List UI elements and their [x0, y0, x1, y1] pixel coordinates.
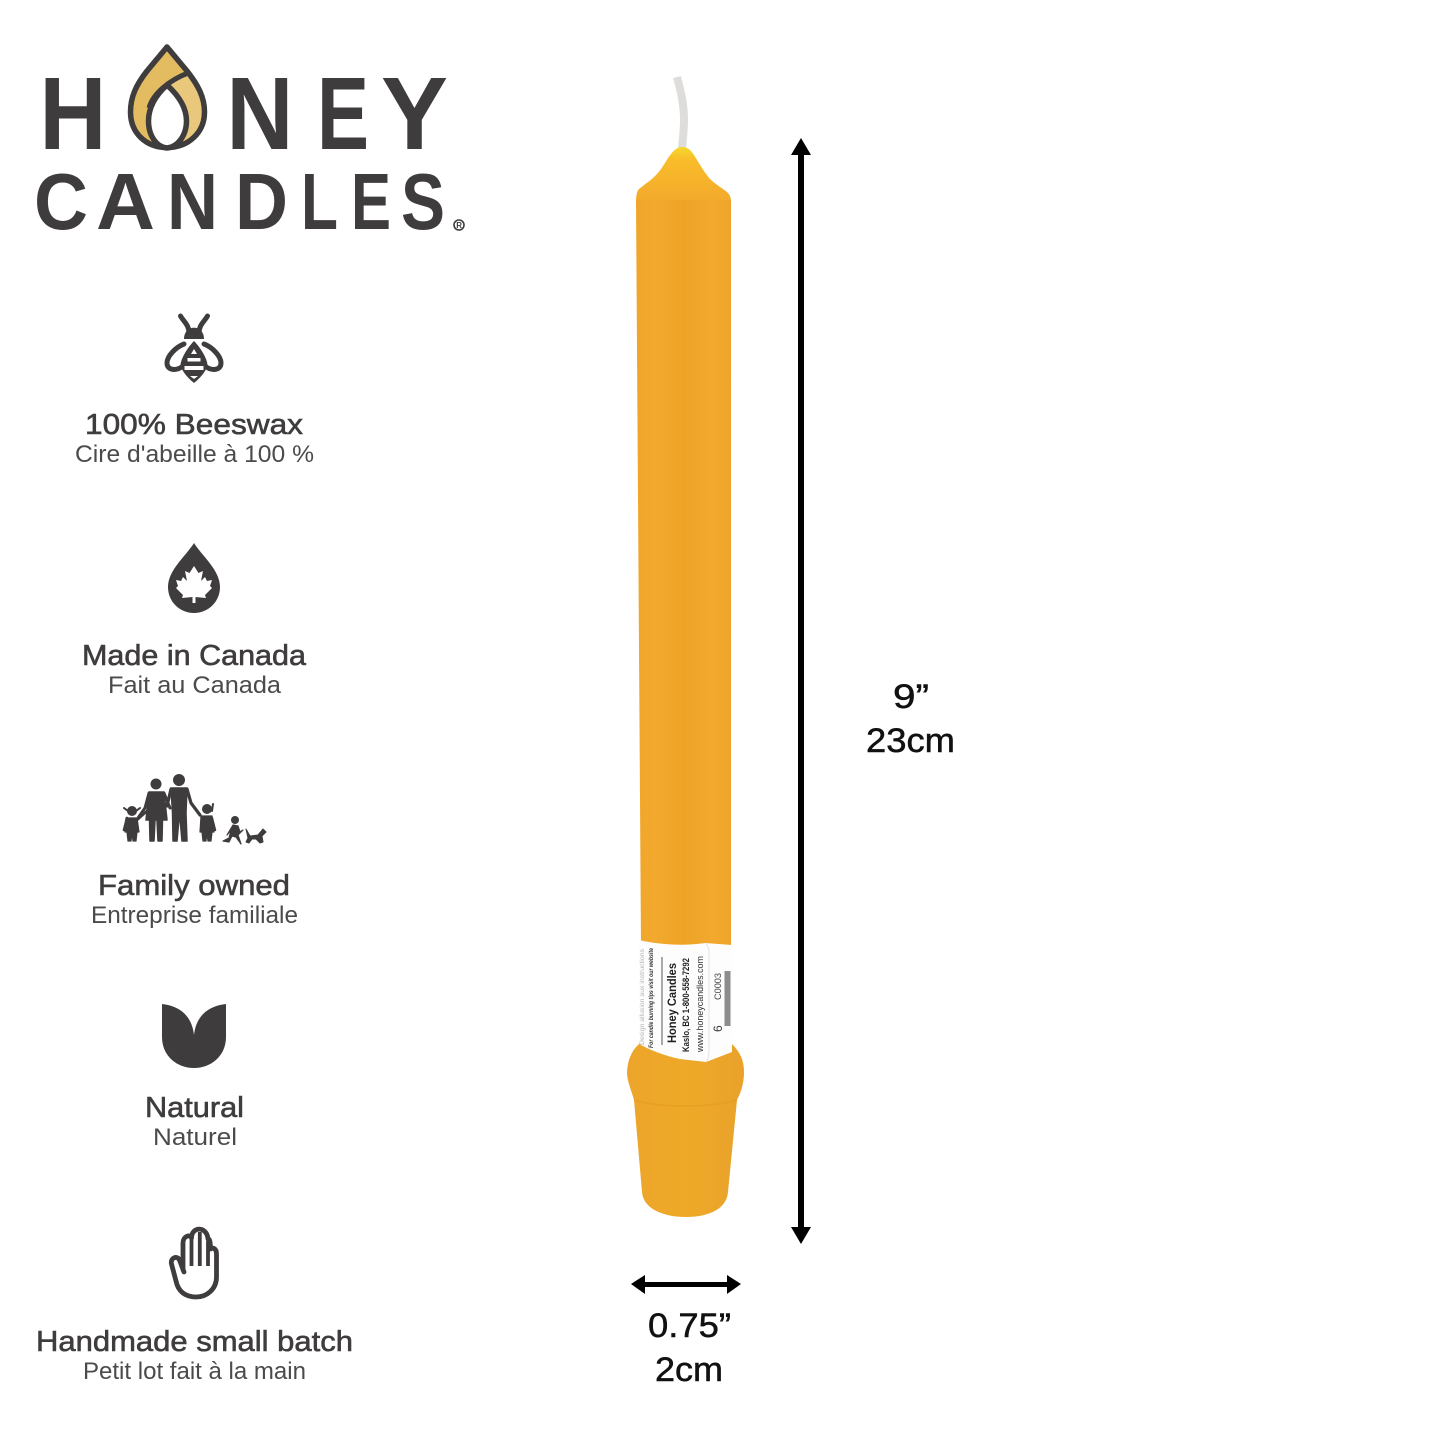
measurement: height label: 23cm	[866, 722, 955, 760]
registered mark	[454, 220, 464, 230]
icon: bee	[167, 316, 221, 383]
measurement: height label: 9”	[893, 678, 929, 716]
label text: Kaslo, BC 1-800-558-7292	[681, 958, 691, 1052]
logo wordmark: CANDLES: E	[351, 157, 391, 246]
icon: family silhouettes	[124, 774, 266, 844]
measurement: width label: 0.75”	[648, 1307, 731, 1345]
measurement: width label: 2cm	[655, 1351, 723, 1389]
french subheading: Entreprise familiale	[91, 902, 298, 929]
feature: Family owned	[91, 774, 298, 929]
feature: 100% Beeswax	[75, 316, 314, 468]
label text: C0003	[713, 973, 723, 1000]
label text	[640, 948, 725, 1053]
logo wordmark: CANDLES: N	[167, 157, 218, 246]
measurement: height label	[866, 678, 955, 760]
label text: 6	[711, 1025, 725, 1032]
feature: Natural	[145, 1004, 244, 1151]
logo wordmark: CANDLES: A	[96, 157, 155, 246]
french subheading: Petit lot fait à la main	[83, 1358, 306, 1385]
logo wordmark: HONEY	[39, 56, 448, 171]
heading: Handmade small batch	[36, 1326, 353, 1358]
arrow: width	[631, 1275, 741, 1294]
candle product photo	[627, 77, 744, 1217]
logo wordmark: HONEY: E	[317, 56, 369, 171]
icon: drop with maple leaf	[168, 543, 220, 613]
logo: Honey Candles	[34, 47, 464, 246]
french subheading: Naturel	[153, 1124, 237, 1151]
feature: Handmade small batch	[36, 1229, 353, 1385]
logo wordmark: HONEY: N	[226, 56, 293, 171]
feature: Made in Canada	[82, 543, 307, 699]
label text: www.honeycandles.com	[695, 956, 706, 1053]
logo wordmark: CANDLES: D	[235, 157, 288, 246]
label text: For candle burning tips visit our website	[648, 948, 655, 1048]
french subheading: Fait au Canada	[108, 672, 282, 699]
logo wordmark: CANDLES: C	[34, 157, 88, 246]
label divider	[661, 957, 663, 1045]
heading: Natural	[145, 1092, 244, 1124]
logo wordmark: CANDLES	[34, 157, 445, 246]
label text: Design allusion aux instructions	[640, 949, 646, 1045]
icon: honey flame logo mark	[130, 47, 204, 148]
label text: Honey Candles	[665, 963, 679, 1043]
french subheading: Cire d'abeille à 100 %	[75, 441, 314, 468]
candle shaft	[636, 200, 731, 948]
icon: open hand	[171, 1229, 216, 1297]
registered mark: R	[456, 221, 462, 230]
candle base collar and cone	[627, 1044, 744, 1217]
arrow: height	[791, 138, 811, 1244]
label barcode	[724, 971, 730, 1026]
logo wordmark: HONEY: Y	[381, 56, 448, 171]
logo wordmark: HONEY: H	[39, 56, 106, 171]
candle label	[639, 940, 732, 1062]
heading: Family owned	[98, 870, 290, 902]
measurement: width label	[648, 1307, 731, 1389]
logo wordmark: CANDLES: S	[401, 157, 445, 246]
icon: leaf tulip	[162, 1004, 226, 1068]
logo wordmark: CANDLES: L	[301, 157, 338, 246]
heading: Made in Canada	[82, 640, 307, 672]
heading: 100% Beeswax	[85, 409, 304, 441]
wick	[677, 77, 684, 148]
candle tip	[636, 147, 731, 202]
